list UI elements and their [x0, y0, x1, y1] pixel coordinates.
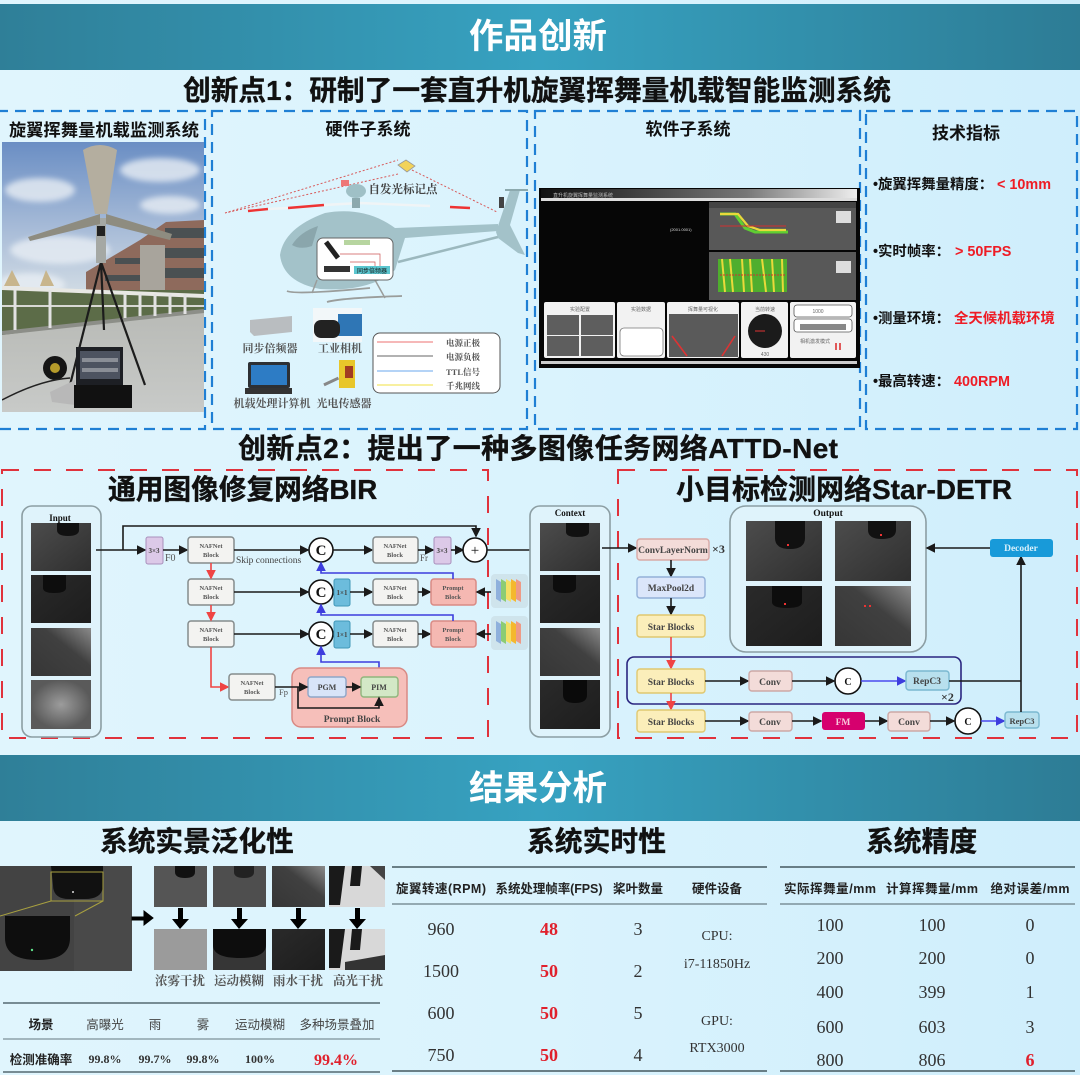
network: encoder decoder: Block — [445, 594, 461, 601]
legend: wiring: 电源负极 — [446, 352, 480, 362]
network: star blocks: Star Blocks — [648, 718, 695, 728]
panel heading: 小目标检测网络Star-DETR — [676, 474, 1012, 505]
network: encoder decoder: NAFNet — [383, 543, 407, 550]
network: star blocks: MaxPool2d — [648, 584, 695, 594]
network: encoder decoder: Block — [387, 594, 403, 601]
table: accuracy: 3 — [1026, 1017, 1034, 1037]
network: encoder decoder: Skip connections — [236, 556, 301, 566]
table: real-time: 5 — [634, 1003, 642, 1023]
table: real-time: 4 — [634, 1045, 642, 1065]
panel heading: 通用图像修复网络BIR — [108, 474, 377, 505]
table: real-time: 750 — [428, 1045, 454, 1065]
table: real-time — [392, 867, 767, 1071]
panel: 技术指标 — [866, 111, 1077, 429]
interference labels: 高光干扰 — [333, 973, 383, 988]
table: detection accuracy: 100% — [245, 1052, 275, 1066]
network: star blocks: C — [964, 717, 972, 728]
part: 同步倍频器: 同步倍频器 — [242, 341, 298, 355]
metric: 精度: < 10mm — [997, 177, 1051, 193]
table: real-time: 50 — [540, 1045, 558, 1065]
table: detection accuracy: 检测准确率 — [10, 1052, 72, 1067]
table: accuracy: 400 — [816, 982, 844, 1002]
table: real-time: RTX3000 — [689, 1041, 745, 1056]
table: accuracy: 200 — [918, 948, 946, 968]
inset: onboard box — [317, 238, 393, 280]
photo: rotor test rig on terrace — [0, 142, 204, 412]
network: encoder decoder: Block — [244, 689, 260, 696]
network: encoder decoder: NAFNet — [199, 585, 223, 592]
network: encoder decoder: Block — [203, 594, 219, 601]
part: 同步倍频器 — [242, 316, 298, 355]
network: encoder decoder: NAFNet — [383, 627, 407, 634]
metric: 精度: •旋翼挥舞量精度： — [873, 175, 993, 193]
prompt block: PGM — [318, 683, 337, 692]
table: accuracy: 100 — [816, 915, 844, 935]
legend: wiring: 千兆网线 — [446, 381, 480, 391]
metric: 转速: •最高转速： — [873, 372, 950, 390]
banner: 作品创新 — [0, 4, 1080, 70]
table: detection accuracy: 高曝光 — [86, 1017, 124, 1032]
arrow — [132, 911, 153, 925]
table: detection accuracy — [3, 1003, 380, 1072]
interference image grid — [154, 866, 385, 970]
metric: 环境: 全天候机载环境 — [954, 309, 1055, 327]
table: detection accuracy: 雨 — [149, 1018, 161, 1032]
table: real-time: 1500 — [423, 961, 459, 981]
table: detection accuracy: 99.7% — [138, 1052, 172, 1066]
network: encoder decoder: C — [316, 585, 326, 601]
network: star blocks: ×3 — [712, 542, 725, 556]
table: real-time: 960 — [428, 919, 454, 939]
legend: wiring: TTL信号 — [446, 367, 481, 377]
network: encoder decoder — [96, 526, 538, 727]
network: encoder decoder: Block — [203, 636, 219, 643]
panel: 系统精度 — [780, 826, 1075, 1071]
metric: 帧率: •实时帧率： — [873, 242, 950, 260]
panel heading: 旋翼挥舞量机载监测系统: 旋翼挥舞量机载监测系统 — [9, 120, 199, 140]
inset: onboard box: 同步倍频器 — [357, 267, 387, 275]
interference labels: 雨水干扰 — [273, 973, 323, 988]
interference labels: 浓雾干扰 — [155, 973, 205, 988]
table: real-time: 48 — [540, 919, 558, 939]
marker label: 自发光标记点 — [368, 181, 439, 197]
control panels: 实验数据 — [631, 306, 651, 313]
network: star blocks: Star Blocks — [648, 623, 695, 633]
network: encoder decoder: C — [316, 543, 326, 559]
chart: top — [709, 202, 856, 250]
control panels: 430 — [761, 352, 769, 358]
table: accuracy: 绝对误差/mm — [990, 881, 1070, 896]
LED marker — [398, 160, 415, 172]
network: star blocks: Decoder — [1004, 544, 1039, 554]
metric: 帧率: > 50FPS — [955, 244, 1012, 260]
table: accuracy: 399 — [918, 982, 946, 1002]
table: detection accuracy: 99.8% — [186, 1052, 220, 1066]
banner: 结果分析: 结果分析 — [469, 770, 607, 808]
control panels: 相机激发模式 — [800, 338, 830, 345]
part: 工业相机 — [313, 308, 362, 355]
helicopter diagram — [225, 160, 528, 302]
network: encoder decoder: 3×3 — [148, 547, 160, 555]
table: accuracy: 806 — [918, 1050, 946, 1070]
table: accuracy: 100 — [918, 915, 946, 935]
metric: 精度 — [873, 175, 1051, 193]
legend: wiring: 电源正极 — [446, 338, 480, 348]
metric: 环境 — [873, 309, 1055, 327]
network: encoder decoder: Block — [203, 552, 219, 559]
network: encoder decoder: NAFNet — [383, 585, 407, 592]
table: real-time: 50 — [540, 1003, 558, 1023]
network: star blocks: Conv — [759, 678, 781, 688]
table: real-time: 硬件设备 — [692, 881, 742, 896]
table: accuracy: 计算挥舞量/mm — [886, 881, 978, 896]
software screenshot — [539, 188, 860, 368]
output image box: Output — [813, 509, 844, 519]
context image column — [530, 506, 610, 737]
table: accuracy: 600 — [816, 1017, 844, 1037]
context image column: Context — [555, 508, 585, 518]
interference labels: 运动模糊 — [214, 973, 264, 988]
panel: 旋翼挥舞量机载监测系统 — [0, 111, 205, 429]
panel: 小目标检测网络Star-DETR — [602, 470, 1077, 738]
network: encoder decoder: NAFNet — [199, 543, 223, 550]
panel: 系统实景泛化性 — [0, 826, 385, 1072]
prompt feature stacks — [491, 574, 528, 650]
control panels: 挥舞量可视化 — [688, 306, 718, 313]
network: encoder decoder: F0 — [165, 553, 176, 564]
table: accuracy: 603 — [918, 1017, 946, 1037]
table: accuracy: 800 — [816, 1050, 844, 1070]
network: encoder decoder: Block — [387, 636, 403, 643]
heading: 创新点2: 创新点2：提出了一种多图像任务网络ATTD-Net — [238, 433, 838, 464]
network: encoder decoder: Block — [387, 552, 403, 559]
table: accuracy: 0 — [1026, 915, 1034, 935]
network: star blocks: C — [844, 677, 852, 688]
control panels — [544, 302, 856, 358]
network: encoder decoder: 3×3 — [436, 547, 448, 555]
network: encoder decoder: 1×1 — [336, 589, 348, 597]
part: 光电传感器 — [316, 360, 372, 410]
part: 机载处理计算机 — [234, 362, 310, 410]
software screenshot: 直升机旋翼挥舞量监测系统 — [553, 192, 613, 199]
control panels: 当前转速 — [755, 306, 775, 313]
table: real-time: 600 — [428, 1003, 454, 1023]
network: star blocks: RepC3 — [913, 677, 941, 687]
network: encoder decoder: + — [471, 543, 479, 559]
metric: 环境: •测量环境： — [873, 309, 950, 327]
network: encoder decoder: 1×1 — [336, 631, 348, 639]
table: real-time: 2 — [634, 961, 642, 981]
network: encoder decoder: NAFNet — [240, 680, 264, 687]
legend: wiring — [373, 333, 500, 393]
table: detection accuracy: 多种场景叠加 — [299, 1018, 375, 1032]
prompt block: Prompt Block — [324, 715, 381, 725]
panel heading: 系统实景泛化性 — [100, 826, 294, 857]
control panels: 1000 — [812, 309, 824, 315]
network: encoder decoder: Prompt — [442, 627, 464, 634]
panel: 系统实时性 — [392, 826, 767, 1071]
table: accuracy: 6 — [1026, 1050, 1034, 1070]
network: star blocks: RepC3 — [1009, 716, 1035, 726]
part: 光电传感器: 光电传感器 — [316, 396, 372, 410]
network: encoder decoder: NAFNet — [199, 627, 223, 634]
table: real-time: 旋翼转速(RPM) — [396, 881, 486, 896]
table: real-time: 3 — [634, 919, 642, 939]
table: real-time: 桨叶数量 — [613, 881, 663, 896]
network: star blocks: Star Blocks — [648, 678, 695, 688]
table: real-time: i7-11850Hz — [684, 957, 750, 972]
table: detection accuracy: 99.4% — [314, 1052, 358, 1069]
network: encoder decoder: Block — [445, 636, 461, 643]
heading: 创新点1: 创新点1：研制了一套直升机旋翼挥舞量机载智能监测系统 — [183, 75, 891, 106]
network: encoder decoder: Fr — [420, 553, 428, 563]
table: real-time: 50 — [540, 961, 558, 981]
interference labels — [155, 973, 383, 988]
table: detection accuracy: 雾 — [197, 1018, 210, 1032]
chart: bottom — [709, 252, 856, 300]
network: star blocks: Conv — [759, 718, 781, 728]
panel: 硬件子系统 — [212, 111, 528, 429]
software screenshot: (2001.0001) — [670, 227, 692, 232]
control panels: 实验配置 — [570, 306, 590, 313]
panel: 软件子系统 — [535, 111, 860, 429]
input image column — [22, 506, 101, 737]
metric: 帧率 — [873, 242, 1012, 260]
table: real-time: GPU: — [701, 1014, 733, 1029]
network: star blocks: FM — [836, 718, 850, 728]
prompt block — [275, 668, 407, 727]
table: detection accuracy: 运动模糊 — [235, 1017, 285, 1032]
prompt block: PIM — [371, 683, 387, 692]
metric: 转速 — [873, 372, 1010, 390]
network: encoder decoder: Fp — [279, 687, 288, 697]
metric: 转速: 400RPM — [954, 374, 1010, 390]
banner: 结果分析 — [0, 755, 1080, 821]
part: 机载处理计算机: 机载处理计算机 — [234, 396, 310, 410]
table: detection accuracy: 场景 — [28, 1018, 54, 1032]
table: real-time: 系统处理帧率(FPS) — [496, 881, 602, 896]
image: source frame with zoomed inset — [0, 866, 132, 971]
network: encoder decoder: Prompt — [442, 585, 464, 592]
network: star blocks — [602, 539, 1053, 734]
panel heading: 硬件子系统: 硬件子系统 — [326, 119, 410, 139]
network: star blocks: ×2 — [941, 690, 954, 704]
table: real-time: CPU: — [701, 929, 733, 944]
banner: 作品创新: 作品创新 — [469, 18, 607, 56]
table: accuracy: 200 — [816, 948, 844, 968]
table: accuracy — [780, 867, 1075, 1071]
input image column: Input — [49, 513, 71, 523]
panel heading: 系统精度 — [866, 826, 977, 857]
output image box — [730, 506, 926, 652]
panel heading: 技术指标: 技术指标 — [932, 124, 1000, 143]
table: accuracy: 实际挥舞量/mm — [784, 881, 876, 896]
table: accuracy: 0 — [1026, 948, 1034, 968]
network: star blocks: Conv — [898, 718, 920, 728]
table: detection accuracy: 99.8% — [88, 1052, 122, 1066]
panel: 通用图像修复网络BIR — [2, 470, 538, 738]
network: star blocks: ConvLayerNorm — [638, 546, 708, 556]
panel heading: 系统实时性 — [527, 826, 666, 857]
network: encoder decoder: C — [316, 627, 326, 643]
part: 工业相机: 工业相机 — [318, 341, 362, 355]
panel heading: 软件子系统: 软件子系统 — [646, 119, 730, 139]
table: accuracy: 1 — [1026, 982, 1034, 1002]
